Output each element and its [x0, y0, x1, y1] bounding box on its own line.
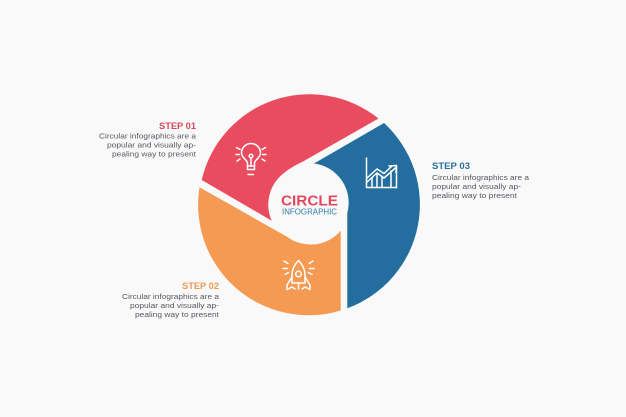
text block: step 03: popular and visually ap- [432, 182, 522, 191]
text block: step 01: pealing way to present [112, 150, 197, 158]
text block: step 01 [99, 121, 197, 158]
icon: growth chart [366, 158, 396, 188]
text block: step 02: popular and visually ap- [130, 301, 220, 310]
segment: orange step 02 [198, 187, 341, 315]
heading: circle: CIRCLE [281, 194, 338, 210]
text block: step 03: Circular infographics are a [432, 173, 530, 182]
text block: step 01: popular and visually ap- [107, 140, 197, 150]
text block: step 02: Circular infographics are a [122, 292, 220, 301]
label: step 03: STEP 03 [432, 161, 470, 171]
text block: step 01: Circular infographics are a [99, 132, 197, 140]
label: step 01: STEP 01 [159, 121, 196, 131]
center title [281, 194, 338, 216]
text block: step 03 [432, 161, 530, 200]
label: step 02: STEP 02 [182, 281, 219, 291]
segment: red step 01 [202, 94, 378, 221]
text block: step 03: pealing way to present [432, 191, 518, 200]
text block: step 02 [122, 281, 220, 319]
subheading: infographic: INFOGRAPHIC [282, 208, 337, 216]
text block: step 02: pealing way to present [135, 310, 220, 319]
icon: light bulb [236, 144, 266, 174]
segment: blue step 03 [314, 123, 420, 308]
icon: rocket [283, 260, 314, 290]
